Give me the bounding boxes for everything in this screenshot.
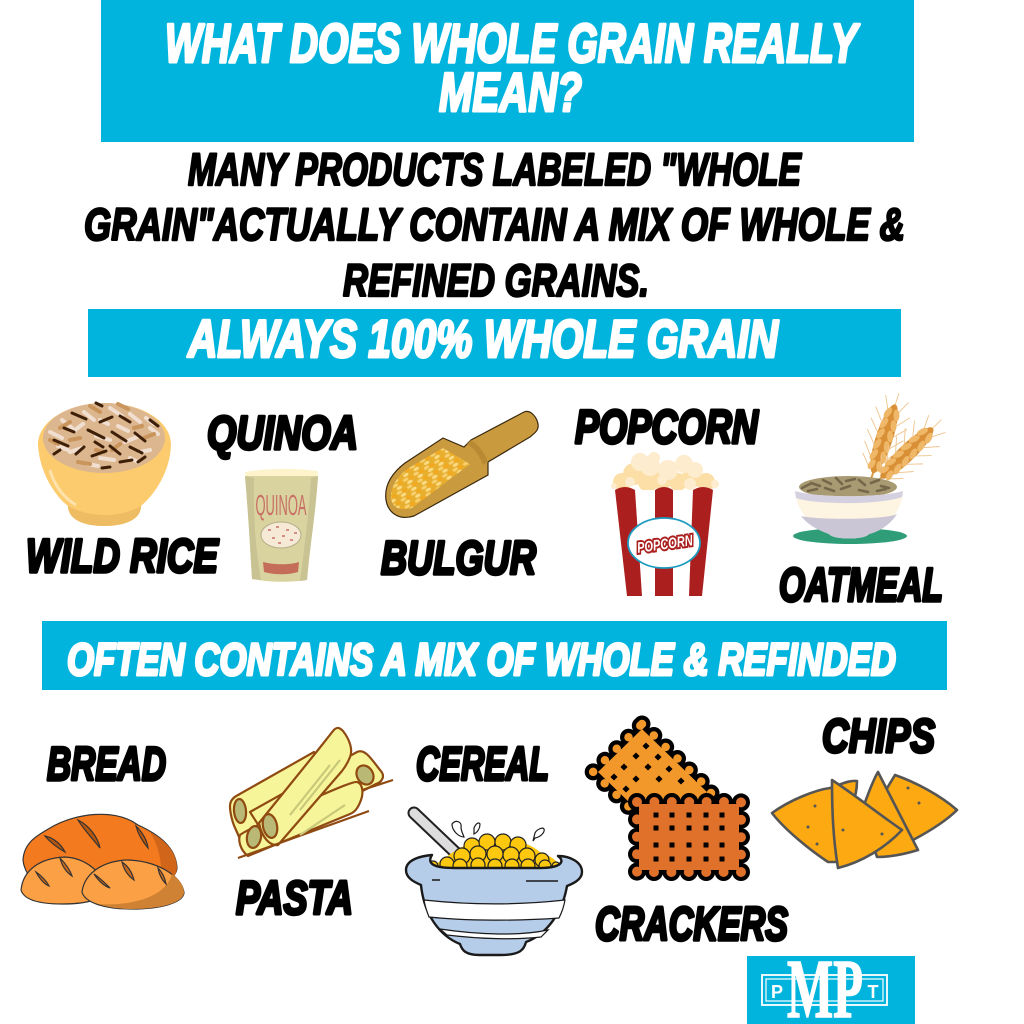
title banner xyxy=(101,0,914,142)
icon: quinoa bag: QUINOA xyxy=(256,490,307,522)
logo badge: P xyxy=(771,982,783,1002)
logo badge: T xyxy=(868,982,878,1002)
icon: popcorn tub xyxy=(611,452,719,596)
icon: tortilla chips xyxy=(772,772,957,868)
label: cereal: CEREAL xyxy=(416,737,549,790)
title banner: MEAN? xyxy=(439,61,582,123)
intro text xyxy=(84,144,905,306)
icon: bread loaves xyxy=(21,814,184,909)
label: crackers: CRACKERS xyxy=(595,897,788,950)
label: pasta: PASTA xyxy=(236,871,353,924)
icon: bulgur scoop xyxy=(386,411,538,517)
icon: quinoa bag xyxy=(245,469,318,582)
intro text: MANY PRODUCTS LABELED "WHOLE xyxy=(188,144,802,195)
label: oatmeal: OATMEAL xyxy=(779,558,943,611)
cracker: square orange xyxy=(593,724,712,840)
icon: popcorn tub: POPCORN xyxy=(636,532,695,557)
section banner: always 100% whole grain: ALWAYS 100% WHOLE GRAIN xyxy=(186,310,779,369)
intro text: REFINED GRAINS. xyxy=(343,255,649,306)
icon: crackers xyxy=(593,724,741,872)
label: chips: CHIPS xyxy=(822,709,935,762)
icon: oatmeal bowl with wheat xyxy=(793,387,955,544)
icon: cereal bowl xyxy=(406,813,582,955)
icon: pasta tubes xyxy=(230,728,393,858)
label: wild rice: WILD RICE xyxy=(26,529,219,582)
cracker: rectangular dark orange xyxy=(637,802,741,872)
label: bread: BREAD xyxy=(47,737,166,790)
label: bulgur: BULGUR xyxy=(381,531,536,584)
label: quinoa: QUINOA xyxy=(207,406,358,459)
section banner: often a mix xyxy=(42,621,947,690)
label: popcorn: POPCORN xyxy=(575,400,759,453)
icon: wild rice bowl xyxy=(38,403,171,526)
